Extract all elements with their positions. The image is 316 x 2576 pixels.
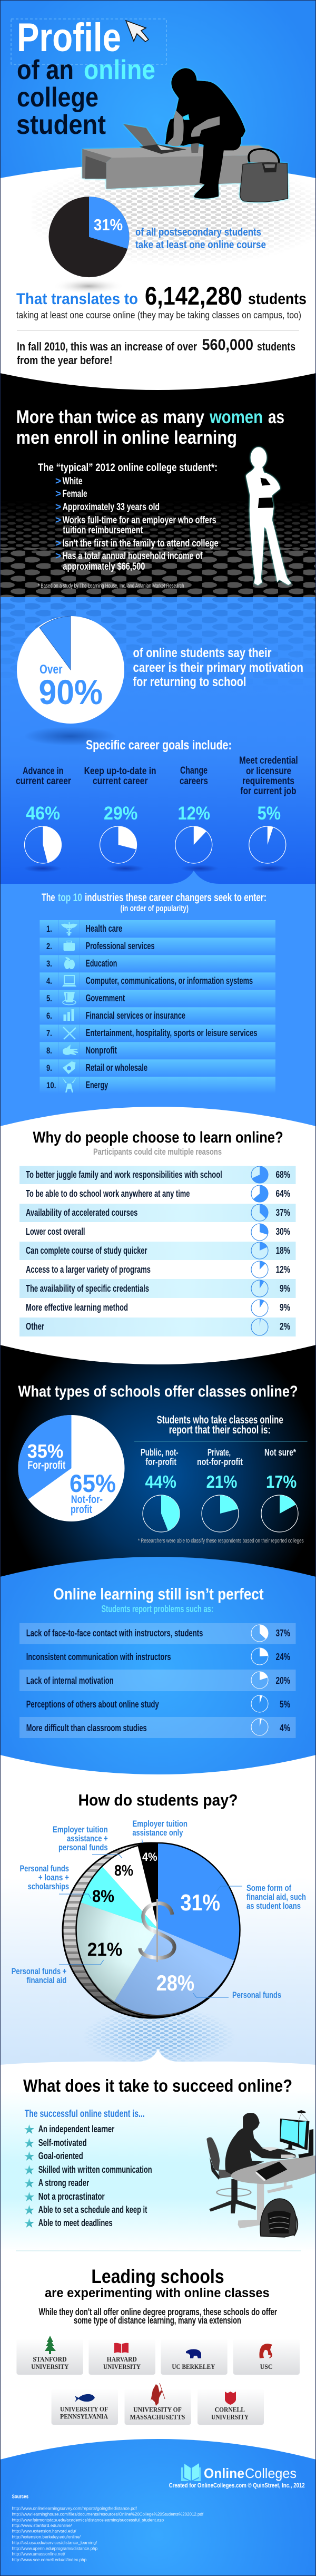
chart: coin pie: 28% <box>156 1970 194 1995</box>
chart: coin pie: 8% <box>92 1887 114 1906</box>
payment labels: personal funds <box>58 1842 108 1852</box>
table: industry rows: 5. <box>46 993 52 1003</box>
sources list: http://cst.usc.edu/services/distance_learning/ <box>12 2540 97 2545</box>
text: share of students: take at least one online course <box>135 239 266 251</box>
heading: top 10 industries: top 10 <box>58 892 82 904</box>
table: reasons: Can complete course of study quicker <box>26 1245 147 1256</box>
sources list: http://www.stanford.edu/online/ <box>12 2523 72 2528</box>
goal labels: or licensure <box>246 766 291 777</box>
school type labels <box>141 1447 296 1467</box>
list: typical online student: Approximately 33 years old <box>63 502 160 513</box>
table: reasons: Other <box>26 1321 44 1332</box>
list: typical online student: White <box>63 476 83 487</box>
goal pie charts <box>24 826 289 872</box>
table: reasons: 30% <box>276 1226 290 1237</box>
text: distance learning note <box>39 2307 277 2326</box>
table: industry rows: 7. <box>46 1028 52 1038</box>
table: reasons: Access to a larger variety of programs <box>26 1264 151 1275</box>
goal labels: Meet credential <box>239 755 298 766</box>
radial glow <box>0 1339 316 1586</box>
heading: women vs men: men enroll in online learning <box>16 427 237 448</box>
school type percentages: 21% <box>206 1472 237 1491</box>
table: problems <box>19 1623 296 1738</box>
pie chart: for-profit vs not-for-profit: For-profit <box>27 1459 65 1471</box>
sources list: http://www.extension.harvard.edu/ <box>12 2529 76 2534</box>
card: University of Massachusetts: MASSACHUSETTS <box>130 2413 185 2421</box>
icon: bars <box>63 1009 74 1021</box>
pie chart: over 90 percent <box>17 616 124 724</box>
card: Cornell: UNIVERSITY <box>211 2413 249 2421</box>
card: UC Berkeley <box>161 2339 228 2375</box>
table: reasons: 37% <box>276 1207 290 1218</box>
table: industry rows: Health care <box>86 923 122 934</box>
table: reasons: The availability of specific credentials <box>26 1283 149 1294</box>
payment labels: Some form of <box>246 1883 291 1893</box>
table: industry rows: Education <box>86 958 117 969</box>
heading: leading schools: are experimenting with online classes <box>45 2286 270 2300</box>
card: Stanford: STANFORD <box>33 2355 67 2363</box>
table: problems: 37% <box>276 1628 290 1638</box>
list: typical online student: > <box>55 551 61 562</box>
card: USC: USC <box>260 2363 272 2370</box>
payment labels: Personal funds <box>232 1990 281 2000</box>
heading: isn't perfect <box>53 1585 264 1614</box>
payment labels: Personal funds + <box>12 1966 66 1976</box>
table: industry rows: Professional services <box>86 941 155 951</box>
panel: white intro section <box>0 163 316 390</box>
list: traits: Able to set a schedule and keep it <box>38 2204 147 2215</box>
card: Cornell <box>197 2389 264 2425</box>
payment labels: financial aid <box>26 1975 66 1985</box>
card: University of Massachusetts: UNIVERSITY OF <box>133 2406 182 2414</box>
pie chart: for-profit vs not-for-profit: Not-for- <box>71 1494 103 1506</box>
card: Harvard: HARVARD <box>107 2355 137 2363</box>
sources list: http://www.sce.cornell.edu/dl/index.php <box>12 2557 86 2562</box>
text: share of students <box>135 227 266 251</box>
list: typical online student: The “typical” 2012 online college student*: <box>38 462 218 474</box>
pie chart: for-profit vs not-for-profit: profit <box>71 1504 92 1516</box>
stat: 6,142,280 students: students <box>248 290 307 308</box>
text: distance learning note: some type of distance learning, many via extension <box>74 2315 241 2326</box>
pie chart: 31 percent <box>48 197 130 277</box>
table: industry rows: 3. <box>46 959 52 969</box>
panel: white lower area <box>0 2256 316 2466</box>
school type percentages <box>145 1472 297 1491</box>
sources list: http://www.fairmontstate.edu/academics/distancelearning/successful_student.asp <box>12 2517 164 2522</box>
icon: apple <box>64 957 75 969</box>
text: career motivation: for returning to school <box>133 675 246 689</box>
sources list <box>12 2494 204 2562</box>
list: traits: Not a procrastinator <box>38 2191 105 2202</box>
heading: leading schools <box>45 2266 270 2300</box>
icon: power tower <box>62 1077 77 1092</box>
chart: coin pie <box>63 1843 240 2018</box>
list: typical online student <box>38 462 219 589</box>
illustration: student at desk <box>206 2110 316 2228</box>
title: of an <box>17 55 74 85</box>
card: University of Pennsylvania: PENNSYLVANIA <box>60 2413 108 2421</box>
table: reasons: To be able to do school work anywhere at any time <box>26 1188 190 1199</box>
table: industry rows: Computer, communications, or information systems <box>86 975 253 986</box>
table: industry rows: Retail or wholesale <box>86 1062 147 1073</box>
chart: coin pie: 31% <box>180 1890 220 1916</box>
school type percentages: 17% <box>266 1472 297 1491</box>
title: Profile <box>17 15 121 60</box>
table: industry rows <box>39 920 275 1094</box>
school type pies <box>143 1495 298 1532</box>
table: industry rows: 8. <box>46 1046 52 1056</box>
pie shadow <box>53 278 124 294</box>
sources list: http://www.umassonline.net/ <box>12 2551 65 2557</box>
text: share of students: of all postsecondary students <box>135 227 261 238</box>
halftone floor <box>43 179 315 259</box>
card: University of Pennsylvania: UNIVERSITY OF <box>60 2405 108 2413</box>
stat: increase of 560,000: from the year before! <box>17 354 113 367</box>
table: reasons: Availability of accelerated courses <box>26 1207 137 1218</box>
pie shadow <box>24 727 117 746</box>
list: typical online student: * Based on a study by The Learning House, Inc. and Aslanian Market Research <box>38 583 184 589</box>
heading: women vs men: as <box>268 407 284 427</box>
title: college <box>17 82 98 113</box>
list: typical online student: Has a total annual household income of <box>63 551 203 562</box>
table: problems: 4% <box>280 1723 290 1733</box>
table: reasons: To better juggle family and work responsibilities with school <box>26 1169 222 1180</box>
title: online <box>84 55 155 85</box>
illustration: student with laptop on bench <box>82 68 288 202</box>
goal labels: Advance in <box>23 766 63 777</box>
heading: women vs men: women <box>209 407 263 427</box>
heading: specific career goals: Specific career goals include: <box>86 738 232 753</box>
floor dots on black <box>0 501 316 553</box>
card: Stanford <box>16 2336 83 2375</box>
heading: isn't perfect: Students report problems such as: <box>101 1604 213 1614</box>
table: problems: Perceptions of others about online study <box>26 1699 159 1710</box>
goal labels: careers <box>180 776 208 787</box>
card: USC <box>233 2339 300 2375</box>
heading: leading schools: Leading schools <box>91 2266 224 2287</box>
sources list: http://www.learninghouse.com/files/documents/resources/Online%20College%20Students%202012.pdf <box>12 2511 204 2516</box>
card: Harvard <box>88 2339 155 2375</box>
panel: what does it take and leading schools <box>0 2048 316 2256</box>
list: traits <box>24 2124 152 2228</box>
table: industry rows: 4. <box>46 976 52 986</box>
goal labels: current career <box>16 776 71 787</box>
school type labels: for-profit <box>145 1457 176 1467</box>
table: reasons: 2% <box>280 1321 290 1332</box>
table: problems: Inconsistent communication with instructors <box>26 1652 171 1662</box>
heading: top 10 industries <box>42 892 266 913</box>
subheading: successful student: The successful online student is... <box>25 2109 145 2120</box>
heading: isn't perfect: Online learning still isn’t perfect <box>53 1585 264 1603</box>
panel: why learn online <box>0 1107 316 1364</box>
list: typical online student: > <box>55 538 61 549</box>
list: typical online student: Female <box>63 489 87 500</box>
leader lines <box>59 1839 242 1997</box>
table: problems: More difficult than classroom studies <box>26 1723 147 1733</box>
goal labels: Change <box>180 765 208 776</box>
goal percentages <box>26 803 281 824</box>
panel: footer <box>0 2439 316 2576</box>
table: industry rows: Entertainment, hospitality, sports or leisure services <box>86 1028 258 1038</box>
goal percentages: 12% <box>178 803 210 824</box>
icon: hand with heart <box>63 1045 78 1055</box>
table: industry rows: Financial services or insurance <box>86 1010 185 1021</box>
pie chart: over 90 percent: Over <box>39 662 63 677</box>
table: industry rows: Nonprofit <box>86 1045 117 1056</box>
stat: increase of 560,000 <box>17 336 295 367</box>
list: traits: Goal-oriented <box>38 2151 83 2161</box>
table: industry rows: 6. <box>46 1011 52 1021</box>
sources list: http://www.upenn.edu/programs/distance.php <box>12 2545 97 2551</box>
list: traits: Able to meet deadlines <box>38 2218 113 2228</box>
list: typical online student: Isn't the first in the family to attend college <box>63 538 219 549</box>
stat: increase of 560,000: 560,000 <box>202 336 253 354</box>
table: reasons: More effective learning method <box>26 1302 128 1313</box>
payment labels <box>12 1819 306 2000</box>
table: problems: Lack of internal motivation <box>26 1675 114 1686</box>
card: UC Berkeley: UC BERKELEY <box>172 2363 215 2370</box>
payment labels: Personal funds <box>20 1863 69 1874</box>
table: reasons: 68% <box>276 1169 290 1180</box>
table: problems: 5% <box>280 1699 290 1710</box>
list: typical online student: Works full-time for an employer who offers <box>63 515 216 526</box>
goal labels: Keep up-to-date in <box>84 766 156 777</box>
table: reasons: 9% <box>280 1283 290 1294</box>
icon: laptop <box>62 975 76 987</box>
icon: briefcase <box>63 941 75 951</box>
table: problems: Lack of face-to-face contact with instructors, students <box>26 1628 203 1638</box>
card: University of Massachusetts <box>124 2383 191 2425</box>
panel: online learning still isn't perfect <box>0 1557 316 1774</box>
table: industry rows: 1. <box>46 924 52 934</box>
table: industry rows: 2. <box>46 941 52 951</box>
illustration: glowing woman silhouette <box>246 447 291 586</box>
heading: why learn online <box>33 1129 283 1157</box>
table: industry rows: Energy <box>86 1080 108 1090</box>
heading: women vs men <box>16 407 284 448</box>
icon: silver dollar sign <box>140 1899 174 1962</box>
icon: top hat <box>63 992 76 1004</box>
table: industry rows: Government <box>86 993 125 1003</box>
stat: increase of 560,000: In fall 2010, this was an increase of over <box>17 340 197 353</box>
pie chart: over 90 percent: 90% <box>39 672 103 711</box>
card: Harvard: UNIVERSITY <box>103 2363 141 2370</box>
card: Cornell: CORNELL <box>215 2406 245 2414</box>
table: reasons: Lower cost overall <box>26 1226 85 1237</box>
panel: top 10 industries <box>0 871 316 1133</box>
school type labels: Public, not- <box>141 1447 179 1458</box>
list: typical online student: > <box>55 515 61 526</box>
sources list: http://www.onlinelearningsurvey.com/reports/goingthedistance.pdf <box>12 2506 137 2511</box>
card: University of Pennsylvania <box>52 2389 118 2425</box>
list: typical online student: approximately $66,500 <box>63 561 145 572</box>
school type percentages: 44% <box>145 1472 176 1491</box>
logo: OnlineColleges: Online <box>204 2465 244 2481</box>
table: problems: 20% <box>276 1675 290 1686</box>
table: reasons <box>19 1166 296 1336</box>
payment labels: Employer tuition <box>53 1824 108 1835</box>
school type labels: Private, <box>208 1447 231 1458</box>
heading: how do students pay: How do students pay? <box>78 1791 238 1809</box>
text: students report <box>157 1414 283 1436</box>
stat: increase of 560,000: students <box>257 340 295 353</box>
table: reasons: 18% <box>276 1245 290 1256</box>
panel: career motivation <box>0 597 316 884</box>
table: reasons: 64% <box>276 1188 290 1199</box>
school type labels: not-for-profit <box>197 1457 243 1467</box>
heading: top 10 industries: The <box>42 892 55 904</box>
list: typical online student: tuition reimbursement <box>63 525 143 536</box>
goal labels <box>16 755 298 797</box>
icon: knife and fork <box>63 1027 76 1039</box>
icons: industries <box>61 922 78 1092</box>
logo: OnlineColleges <box>181 2463 297 2481</box>
pie chart: for-profit vs not-for-profit <box>18 1415 124 1521</box>
heading: women vs men: More than twice as many <box>16 407 204 427</box>
dots on blue <box>1 597 315 660</box>
payment labels: assistance only <box>132 1828 183 1838</box>
list: typical online student: > <box>55 476 61 487</box>
goal percentages: 5% <box>258 803 281 824</box>
payment labels: as student loans <box>246 1901 301 1911</box>
chart: coin pie: 21% <box>87 1939 122 1960</box>
list: traits: Skilled with written communication <box>38 2164 152 2175</box>
halftone under coin <box>88 2011 230 2062</box>
payment labels: scholarships <box>28 1881 69 1891</box>
chart: coin pie: 4% <box>142 1850 157 1863</box>
icon: caduceus <box>61 922 77 935</box>
goal labels: requirements <box>242 776 294 787</box>
card: Stanford: UNIVERSITY <box>31 2363 69 2370</box>
text: career motivation <box>133 646 303 689</box>
pie chart: for-profit vs not-for-profit: 35% <box>27 1440 64 1462</box>
list: traits: Self-motivated <box>38 2138 87 2148</box>
payment labels: assistance + <box>67 1833 108 1843</box>
text: students report: report that their school is: <box>169 1424 271 1436</box>
stat: 6,142,280 students <box>16 282 307 320</box>
panel: hero background <box>0 0 316 182</box>
table: problems: 24% <box>276 1652 290 1662</box>
list: typical online student: > <box>55 489 61 500</box>
goal percentages: 46% <box>26 803 60 824</box>
heading: top 10 industries: (in order of popularity) <box>120 903 189 913</box>
table: industry rows: 9. <box>46 1063 52 1073</box>
chart: coin pie: 8% <box>114 1862 133 1879</box>
stat: 6,142,280 students: 6,142,280 <box>145 282 242 310</box>
sources list: Sources <box>12 2494 28 2500</box>
heading: why learn online: Participants could cite multiple reasons <box>93 1147 222 1157</box>
goal percentages: 29% <box>104 803 137 824</box>
sources list: http://extension.berkeley.edu/online/ <box>12 2534 81 2540</box>
stat: 6,142,280 students: That translates to <box>16 290 138 308</box>
payment labels: Employer tuition <box>132 1819 187 1829</box>
logo: OnlineColleges: Colleges <box>245 2465 297 2481</box>
list: typical online student: > <box>55 502 61 513</box>
pie chart: 31 percent: 31% <box>94 216 123 234</box>
table: reasons: 9% <box>280 1302 290 1313</box>
goal labels: for current job <box>240 786 296 797</box>
pie chart: for-profit vs not-for-profit: 65% <box>70 1469 116 1497</box>
panel: how students pay background <box>0 1750 316 2068</box>
title: student <box>16 110 106 140</box>
icon: mouse cursor <box>126 21 149 42</box>
list: traits: An independent learner <box>38 2124 114 2134</box>
panel: black schools band <box>0 1339 316 1586</box>
payment labels: + loans + <box>38 1872 69 1882</box>
text: career motivation: of online students say their <box>133 646 272 660</box>
goal labels: current career <box>93 776 148 787</box>
panel: black band behind first white section <box>0 366 316 601</box>
table: industry rows: 10. <box>46 1080 56 1090</box>
title <box>11 15 166 140</box>
table: reasons: 12% <box>276 1264 290 1275</box>
list: traits: A strong reader <box>38 2178 89 2188</box>
illustration: backpack <box>260 2199 298 2237</box>
icon: price tag <box>63 1061 76 1074</box>
school type labels: Not sure* <box>264 1447 296 1458</box>
